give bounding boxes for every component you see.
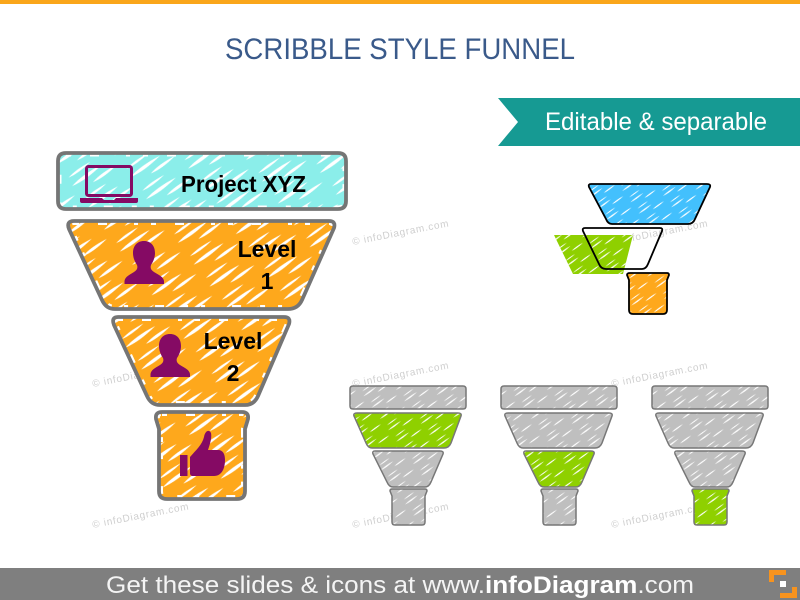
banner: editable and separable [498, 98, 800, 146]
watermarks: © infoDiagram.com [610, 360, 709, 390]
watermarks: © infoDiagram.com [91, 360, 190, 390]
label: number 2: 2 [227, 360, 239, 386]
banner: editable and separable: Editable & separable [545, 108, 767, 136]
label: Level 2: Level [204, 328, 262, 354]
label: Project XYZ: Project XYZ [181, 171, 306, 197]
watermarks [91, 218, 709, 531]
watermarks: © infoDiagram.com [351, 218, 450, 248]
exploded funnel [554, 184, 710, 314]
small funnel: level 1 highlighted [350, 386, 466, 525]
icon: laptop [80, 166, 138, 203]
tier: Level 1 [68, 221, 334, 309]
orange tier [627, 273, 669, 314]
tier: Project XYZ [58, 153, 346, 209]
icon: person [150, 334, 190, 377]
watermarks: © infoDiagram.com [610, 218, 709, 248]
icon: person [124, 241, 164, 284]
green scribble offset [554, 235, 633, 274]
watermarks: © infoDiagram.com [610, 501, 709, 531]
tier: bottom [156, 412, 248, 499]
icon: infoDiagram logo [769, 570, 797, 598]
top accent bar [0, 0, 800, 4]
blue tier [589, 184, 710, 224]
outline tier [583, 228, 662, 269]
title: SCRIBBLE STYLE FUNNEL [225, 33, 575, 66]
icon: thumbs up [180, 431, 225, 476]
footer text: Get these slides & icons at www. infoDiagram .com [106, 572, 694, 599]
footer bar [0, 568, 800, 600]
label: number 1: 1 [261, 268, 274, 294]
main funnel [58, 153, 346, 499]
small funnel: bottom highlighted [652, 386, 768, 525]
label: Level 1: Level [238, 236, 296, 262]
tier: Level 2 [113, 317, 289, 405]
watermarks: © infoDiagram.com [351, 501, 450, 531]
watermarks: © infoDiagram.com [91, 501, 190, 531]
watermarks: © infoDiagram.com [351, 360, 450, 390]
small funnel: level 2 highlighted [501, 386, 617, 525]
